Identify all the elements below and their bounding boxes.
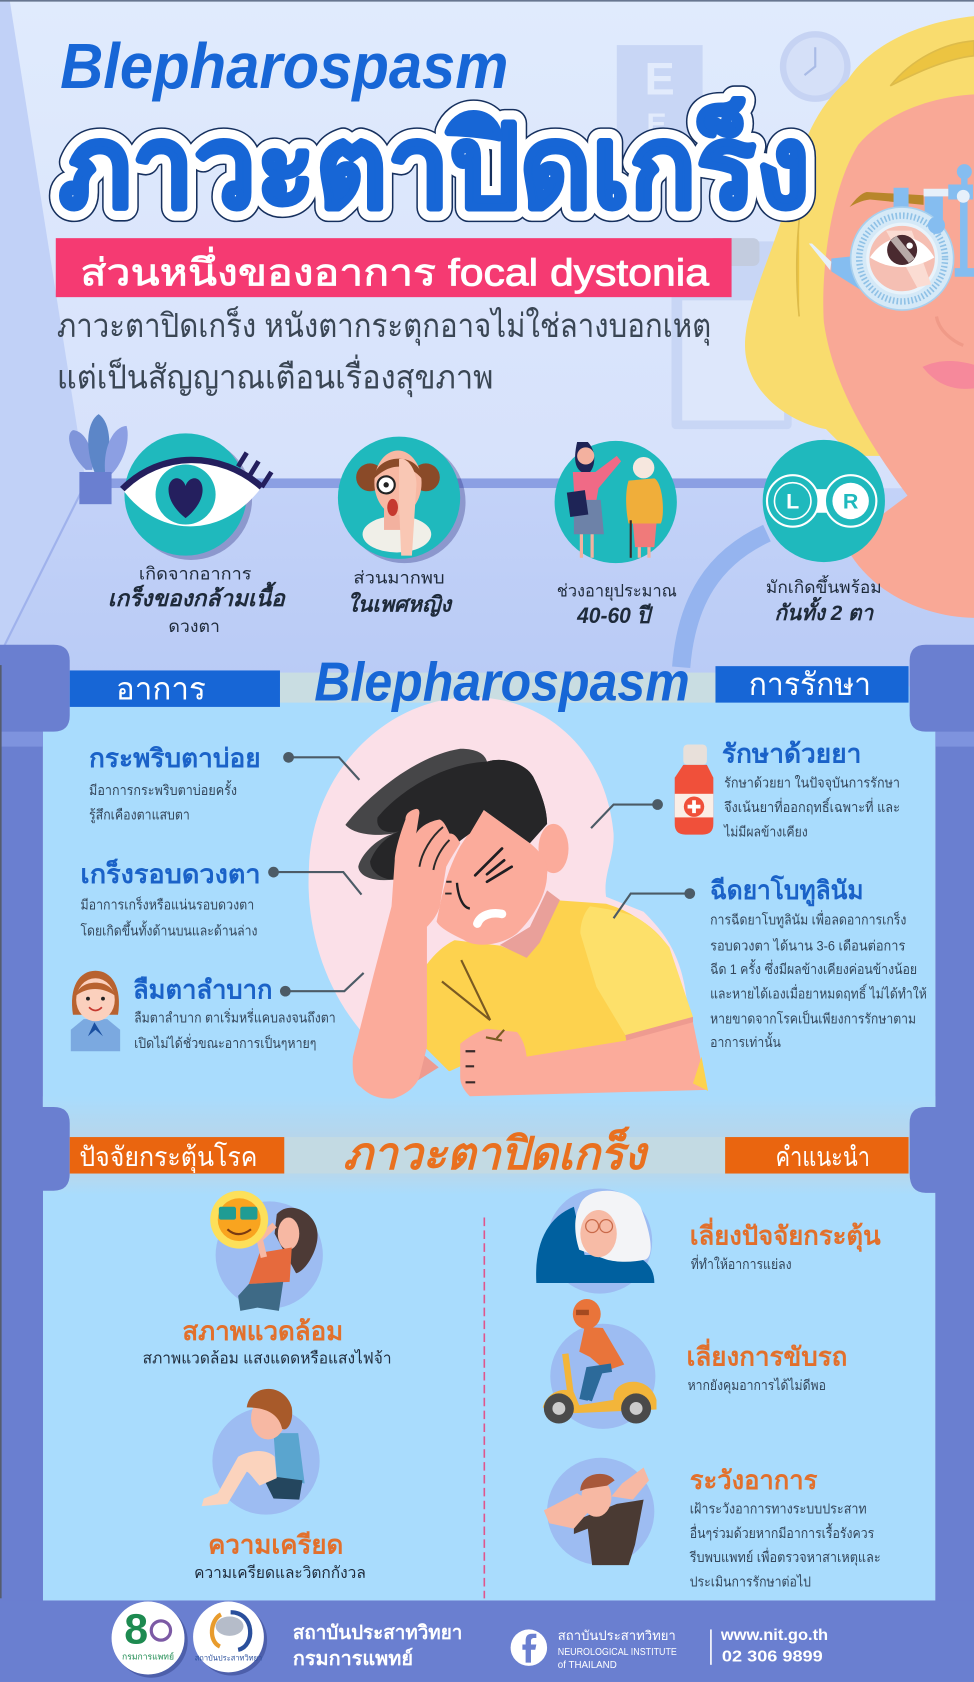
intro text: แต่เป็นสัญญาณเตือนเรื่องสุขภาพ <box>57 354 493 397</box>
hair <box>745 16 974 456</box>
trigger: environment: สภาพแวดล้อม แสงแดดหรือแสงไฟจ้า <box>143 1348 392 1367</box>
heading band: triggers / condition / advice: คำแนะนำ <box>776 1142 870 1172</box>
trigger: environment <box>143 1318 392 1367</box>
footer: institute name: กรมการแพทย์ <box>293 1647 413 1670</box>
icon: scooter rider <box>543 1299 656 1429</box>
face and neck <box>823 94 974 618</box>
background: clipboard <box>672 238 792 429</box>
treatment: botulinum injection: รอบดวงตา ได้นาน 3-6 เดือนต่อการ <box>710 937 906 953</box>
footer: facebook page name: of THAILAND <box>558 1660 617 1671</box>
trigger: stress: ความเครียด <box>208 1530 343 1559</box>
icon: schoolgirl <box>71 971 120 1051</box>
caption: muscle spasm: เกร็งของกล้ามเนื้อ <box>108 581 286 611</box>
lower arm and fist <box>460 1022 707 1096</box>
advice: watch for symptoms: ระวังอาการ <box>690 1467 818 1495</box>
trigger: stress <box>194 1530 366 1582</box>
intro text: ภาวะตาปิดเกร็ง หนังตากระตุกอาจไม่ใช่ลางบอกเหตุ <box>57 306 711 346</box>
advice: avoid driving <box>687 1339 847 1394</box>
caption: age range <box>557 580 677 628</box>
ear <box>538 824 569 873</box>
treatment: botulinum injection: อาการเท่านั้น <box>710 1032 781 1050</box>
title: Thai outlined heading: ภาวะตาปิดเกร็ง <box>59 97 810 232</box>
footer: facebook page name: NEUROLOGICAL INSTITUTE <box>558 1647 677 1658</box>
treatment: medicine: จึงเน้นยาที่ออกฤทธิ์เฉพาะที่ และ <box>724 797 900 815</box>
treatment: medicine <box>722 741 900 840</box>
illustration: man with headache <box>345 749 708 1099</box>
advice: avoid driving: หากยังคุมอาการได้ไม่ดีพอ <box>688 1377 826 1394</box>
lips <box>923 361 974 389</box>
divider dashed <box>483 1218 485 1598</box>
advice: watch for symptoms: เฝ้าระวังอาการทางระบบประสาท <box>690 1501 867 1517</box>
head <box>437 810 547 945</box>
intro text <box>57 306 711 397</box>
caption: muscle spasm <box>108 563 286 636</box>
symptom: difficulty opening eyes <box>133 976 336 1051</box>
trigger: stress: ความเครียดและวิตกกังวล <box>194 1564 366 1582</box>
lens frame arms <box>831 172 974 290</box>
treatment: botulinum injection <box>710 875 927 1050</box>
background: wall clock <box>780 31 851 102</box>
heading band: triggers / condition / advice: ปัจจัยกระตุ้นโรค <box>79 1142 257 1173</box>
heading band: triggers / condition / advice <box>70 1126 909 1179</box>
shirt folds <box>442 960 504 1041</box>
advice: watch for symptoms: ประเมินการรักษาต่อไป <box>690 1574 811 1590</box>
plant decoration <box>69 414 128 504</box>
advice: watch for symptoms <box>689 1467 881 1590</box>
symptom: difficulty opening eyes: เปิดไม่ได้ชั่วขณะอาการเป็นๆหายๆ <box>134 1034 316 1051</box>
advice: watch for symptoms: รีบพบแพทย์ เพื่อตรวจหาสาเหตุและ <box>689 1548 881 1566</box>
footer: facebook page name <box>558 1628 677 1671</box>
symptom: spasm around eye: มีอาการเกร็งหรือแน่นรอบดวงตา <box>80 896 254 913</box>
caption: muscle spasm: ดวงตา <box>168 616 220 636</box>
background: room wall and floor <box>0 0 974 703</box>
hair darker layer <box>370 760 547 880</box>
nose <box>936 316 963 345</box>
caption: both eyes: มักเกิดขึ้นพร้อม <box>766 575 882 597</box>
forearm and hand <box>353 809 460 1099</box>
caption: mostly female: ส่วนมากพบ <box>353 568 445 588</box>
symptom: spasm around eye <box>80 858 261 938</box>
background: eye chart: E <box>646 108 667 141</box>
panel: triggers and advice background <box>0 665 974 1600</box>
torso <box>426 902 691 1069</box>
lens ring <box>851 207 954 310</box>
clenched mouth <box>477 913 502 924</box>
logo: department 80 years <box>112 1602 188 1678</box>
footer: contact details: www.nit.go.th <box>720 1626 828 1644</box>
icon: older woman <box>536 1189 654 1294</box>
title: Thai outlined heading: ภาวะตาปิดเกร็ง <box>59 97 810 232</box>
caption: age range: ช่วงอายุประมาณ <box>557 580 677 601</box>
symptom: frequent blinking: กระพริบตาบ่อย <box>89 745 261 773</box>
icon: contact lens case L R <box>763 440 885 562</box>
caption: both eyes <box>766 575 882 625</box>
treatment: botulinum injection: และหายได้เองเมื่อยาหมดฤทธิ์ ไม่ได้ทำให้ <box>710 984 927 1002</box>
advice: watch for symptoms: อื่นๆร่วมด้วยหากมีอาการเรื้อรังควร <box>690 1523 875 1541</box>
advice: avoid driving: เลี่ยงการขับรถ <box>687 1339 847 1372</box>
treatment: botulinum injection: ฉีด 1 ครั้ง ซึ่งมีผลข้างเคียงค่อนข้างน้อย <box>710 959 917 977</box>
footer band <box>0 1600 974 1682</box>
treatment: medicine: รักษาด้วยยา <box>722 741 861 769</box>
icon: eye with heart <box>122 433 271 560</box>
hair lighter layer <box>345 749 547 880</box>
caption: muscle spasm: เกิดจากอาการ <box>139 563 252 583</box>
skin between arm and shirt <box>413 1051 439 1083</box>
leader lines <box>268 752 695 997</box>
collar <box>500 890 560 958</box>
footer: contact details <box>710 1626 828 1666</box>
eyebrow <box>850 192 924 207</box>
heading band: symptoms / Blepharospasm / treatment <box>70 650 909 1035</box>
lens stripes <box>886 231 931 287</box>
footer: facebook page name: สถาบันประสาทวิทยา <box>558 1628 676 1643</box>
heading band: triggers / condition / advice: ภาวะตาปิดเกร็ง <box>343 1126 650 1179</box>
fist lines <box>466 1051 475 1082</box>
heading band: symptoms / Blepharospasm / treatment: Blepharospasm <box>314 650 690 712</box>
illustration: blonde woman with trial lens frame <box>745 16 974 618</box>
logo: department 80 years: กรมการแพทย์ <box>122 1651 174 1661</box>
treatment: botulinum injection: หายขาดจากโรคเป็นเพียงการรักษาตาม <box>710 1009 916 1026</box>
banner: pink subtitle <box>56 238 732 297</box>
advice: avoid triggers: เลี่ยงปัจจัยกระตุ้น <box>690 1217 881 1252</box>
symptom: spasm around eye: โดยเกิดขึ้นทั้งด้านบนและด้านล่าง <box>80 920 257 938</box>
advice: avoid triggers: ที่ทำให้อาการแย่ลง <box>691 1255 792 1272</box>
sleeve shadow <box>625 1017 693 1042</box>
closed eye <box>475 849 512 882</box>
symptom: difficulty opening eyes: ลืมตาลำบาก ตาเริ่มหรี่แคบลงจนถึงตา <box>134 1008 336 1025</box>
logo: neurological institute: สถาบันประสาทวิทยา <box>195 1654 262 1663</box>
background: eye chart <box>617 45 703 165</box>
icon: stressed boy <box>202 1389 320 1515</box>
symptom: frequent blinking: มีอาการกระพริบตาบ่อยครั้ง <box>89 780 237 798</box>
symptom: frequent blinking: รู้สึกเคืองตาแสบตา <box>89 807 190 824</box>
icon: medicine bottle <box>675 744 713 835</box>
sleeve <box>580 906 693 1035</box>
background: eye chart: E <box>645 53 675 104</box>
title: Blepharospasm: Blepharospasm <box>60 30 508 102</box>
logo: department 80 years: 8 <box>124 1605 148 1653</box>
caption: mostly female <box>347 568 454 617</box>
banner: pink subtitle: ส่วนหนึ่งของอาการ focal dystonia <box>80 246 709 293</box>
caption: age range: 40-60 ปี <box>576 603 654 628</box>
yellow sliver <box>693 1057 708 1091</box>
footer: institute name <box>293 1622 462 1670</box>
icon: facebook <box>511 1629 547 1666</box>
decorative curve on floor <box>681 533 767 667</box>
treatment: medicine: รักษาด้วยยา ในปัจจุบันการรักษา <box>724 774 900 791</box>
footer: institute name: สถาบันประสาทวิทยา <box>293 1622 462 1644</box>
icon: woman covering eye <box>338 437 466 563</box>
pink circle behind man <box>309 697 687 1035</box>
treatment: medicine: ไม่มีผลข้างเคียง <box>723 824 808 840</box>
eye <box>870 237 934 267</box>
icon: woman and sun <box>210 1191 323 1311</box>
treatment: botulinum injection: ฉีดยาโบทูลินัม <box>710 875 864 907</box>
symptom: spasm around eye: เกร็งรอบดวงตา <box>80 858 261 889</box>
hair shading <box>797 41 974 316</box>
panel: symptoms and treatment background <box>0 645 974 1110</box>
icon: man holding head <box>544 1458 654 1565</box>
title: Thai outlined heading: ภาวะตาปิดเกร็ง <box>59 97 810 232</box>
icon: contact lens case L R: R <box>843 489 859 513</box>
finger lines <box>419 827 452 894</box>
icon: two women of different ages <box>555 441 677 563</box>
symptom: difficulty opening eyes: ลืมตาลำบาก <box>133 976 272 1005</box>
treatment: botulinum injection: การฉีดยาโบทูลินัม เพื่อลดอาการเกร็ง <box>710 911 906 929</box>
trigger: environment: สภาพแวดล้อม <box>182 1318 343 1346</box>
nose <box>457 883 470 909</box>
footer: contact details: 02 306 9899 <box>722 1648 823 1666</box>
symptom: frequent blinking <box>89 745 261 824</box>
heading band: symptoms / Blepharospasm / treatment: อาการ <box>116 671 206 706</box>
logo: neurological institute <box>193 1602 267 1676</box>
heading band: symptoms / Blepharospasm / treatment: การรักษา <box>749 667 871 702</box>
caption: both eyes: กันทั้ง 2 ตา <box>774 596 874 625</box>
icon: contact lens case L R: L <box>786 489 799 513</box>
advice: avoid triggers <box>690 1217 881 1272</box>
caption: mostly female: ในเพศหญิง <box>347 591 454 617</box>
